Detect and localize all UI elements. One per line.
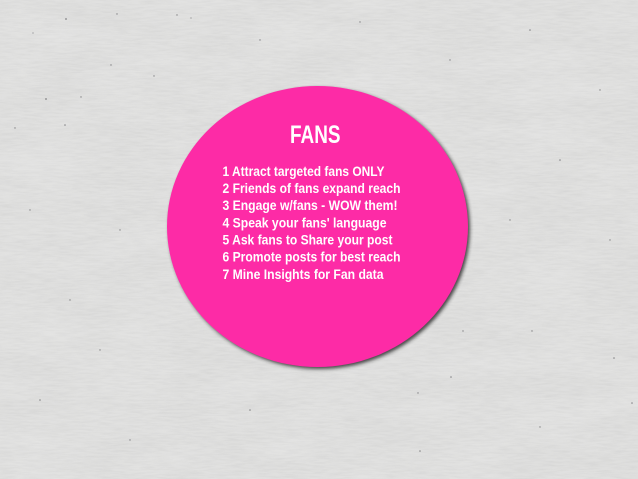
item 3: 3 Engage w/fans - WOW them! bbox=[222, 197, 398, 213]
list: seven tips about fans bbox=[222, 163, 400, 282]
item 6: 6 Promote posts for best reach bbox=[222, 249, 400, 265]
item 4: 4 Speak your fans' language bbox=[222, 214, 387, 230]
badge: pink oval with drop shadow bbox=[167, 86, 470, 369]
heading: FANS: FANS bbox=[290, 121, 340, 149]
item 5: 5 Ask fans to Share your post bbox=[222, 232, 393, 248]
item 2: 2 Friends of fans expand reach bbox=[222, 180, 400, 196]
item 1: 1 Attract targeted fans ONLY bbox=[222, 163, 385, 179]
item 7: 7 Mine Insights for Fan data bbox=[222, 266, 384, 282]
